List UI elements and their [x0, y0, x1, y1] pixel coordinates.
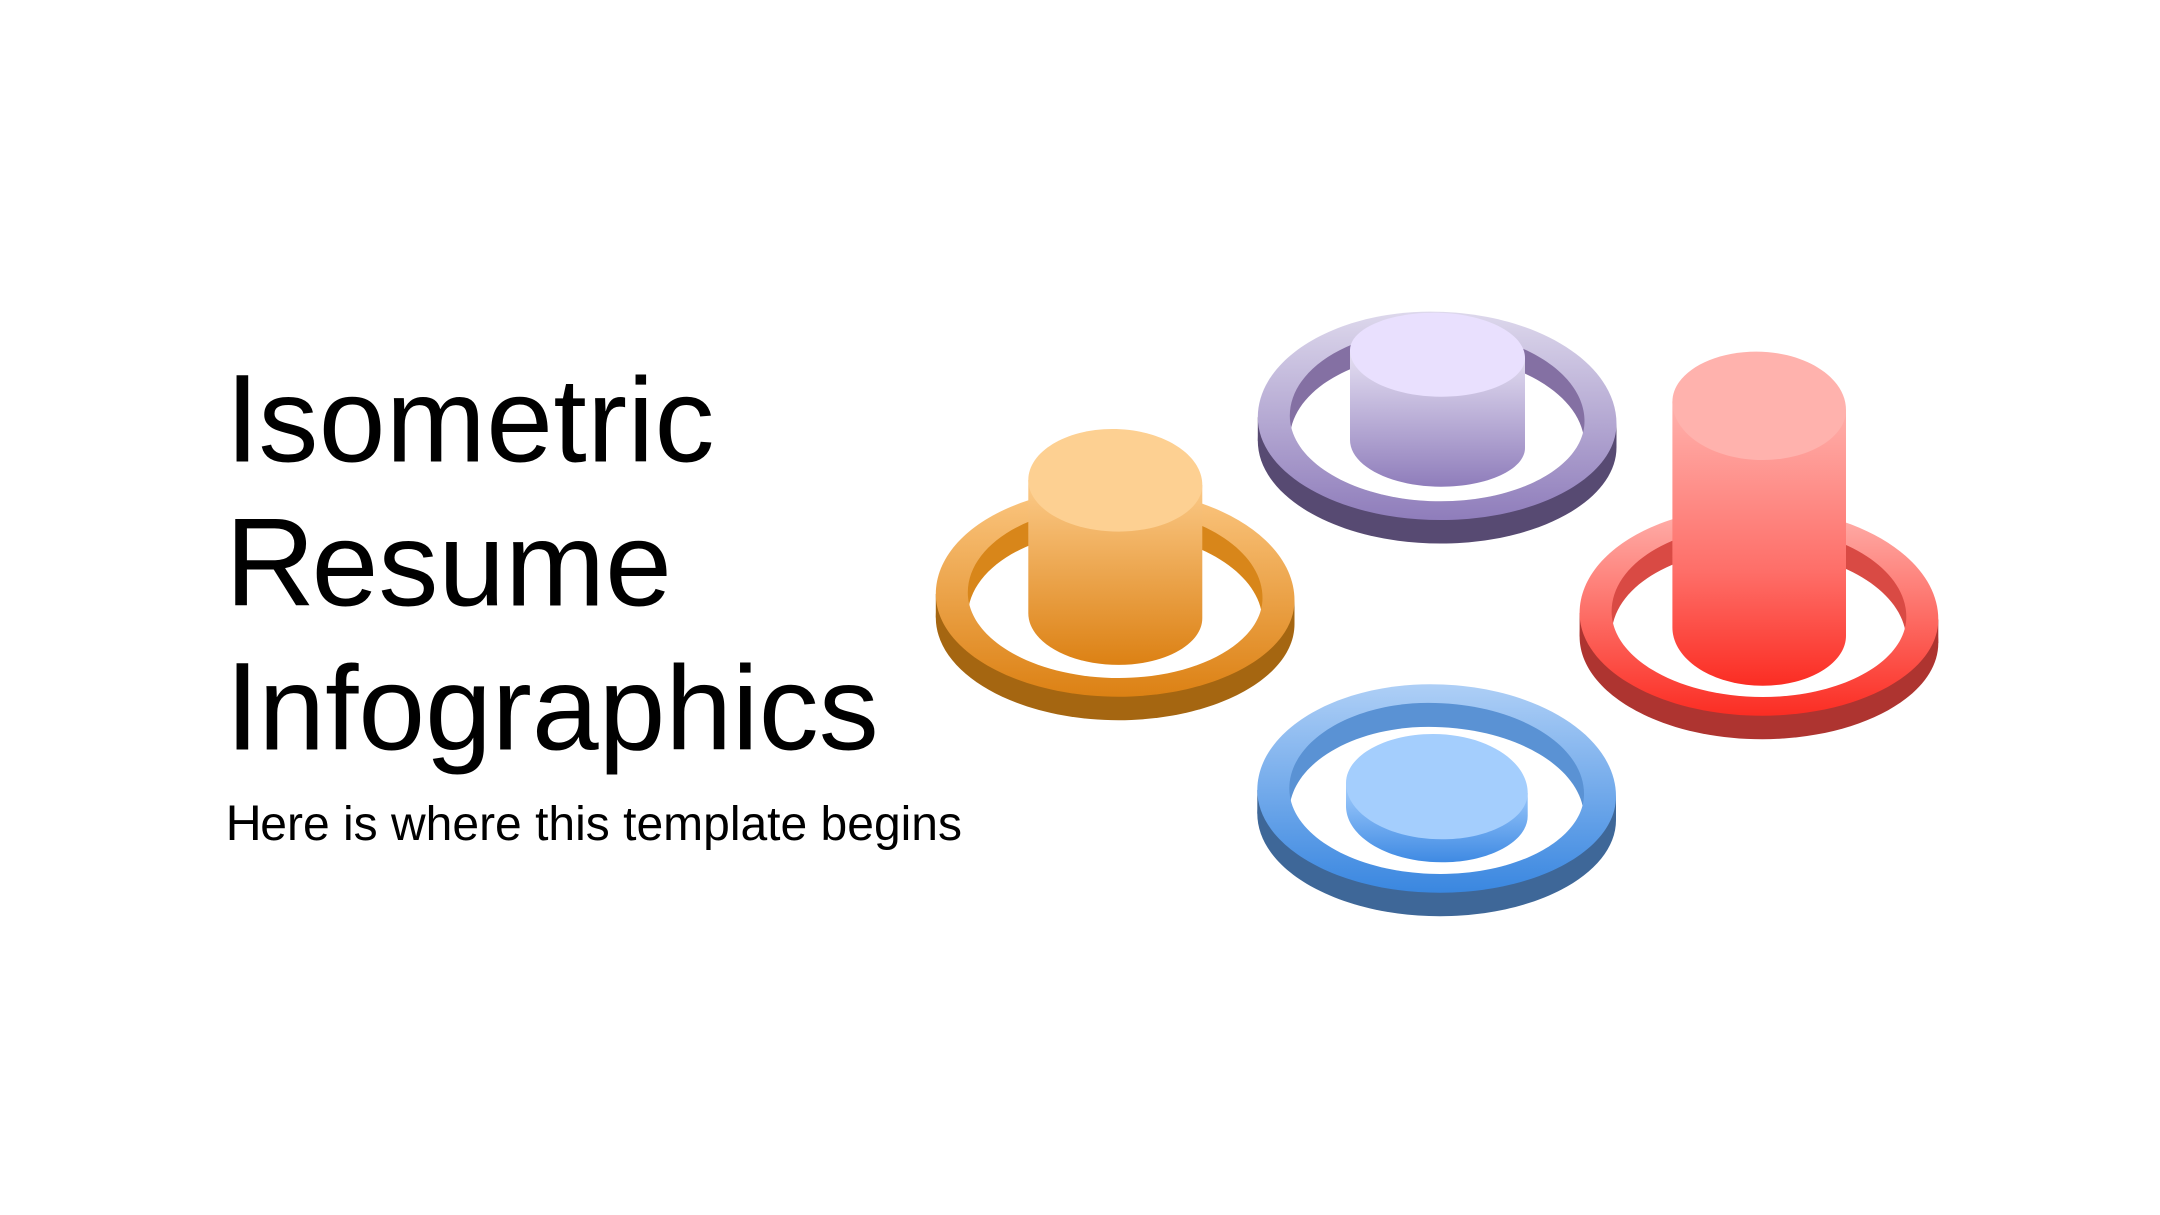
purple ring and short cylinder	[1258, 312, 1617, 544]
red ring	[1580, 507, 1938, 739]
blue puck	[1346, 734, 1528, 862]
orange ring	[936, 488, 1294, 720]
red ring and tall cylinder	[1580, 352, 1938, 739]
subtitle: Here is where this template begins	[226, 795, 962, 851]
red cylinder	[1672, 352, 1846, 686]
title: Infographics	[225, 638, 879, 776]
orange ring and medium cylinder	[936, 429, 1294, 720]
title: Isometric	[225, 350, 715, 488]
title	[225, 350, 879, 776]
title: Resume	[225, 494, 672, 632]
orange cylinder	[1028, 429, 1202, 665]
blue ring and flat puck	[1257, 684, 1616, 916]
blue ring	[1257, 684, 1616, 916]
purple cylinder	[1350, 313, 1525, 487]
purple ring	[1258, 312, 1616, 544]
